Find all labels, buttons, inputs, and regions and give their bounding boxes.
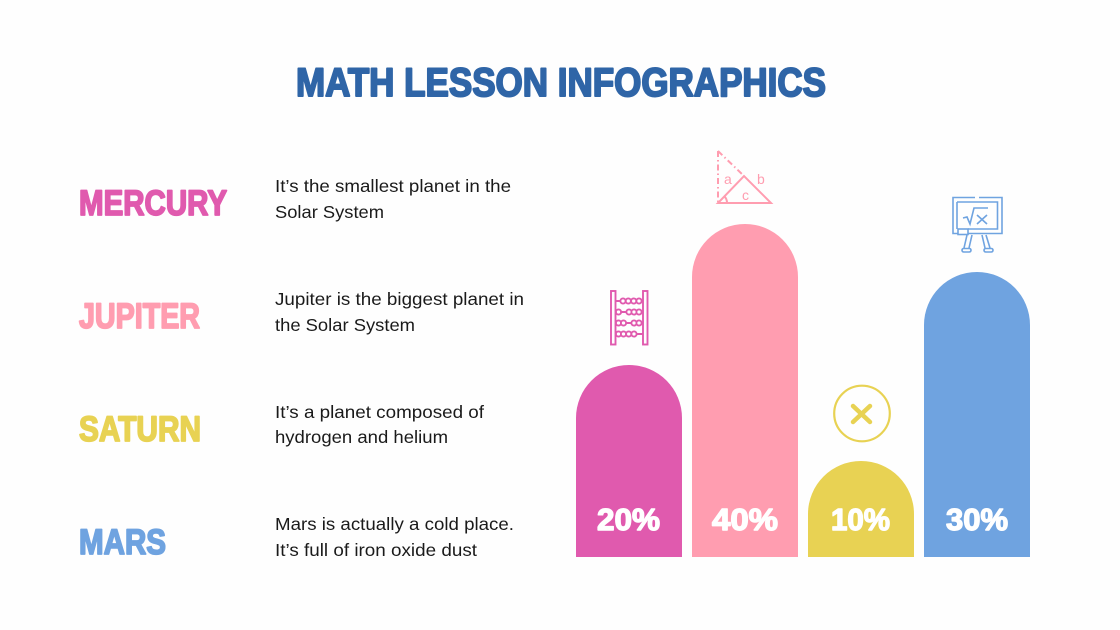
bar: 10%: 10% [831,502,890,537]
description: Saturn [275,402,484,447]
icon: multiply circle [834,386,890,441]
heading: Jupiter: JUPITER [79,297,200,336]
icon: whiteboard with square root [953,198,1002,252]
description: Jupiter [275,289,524,335]
bar chart [576,224,1030,557]
description: Mars [275,514,514,560]
bar: 40% [692,224,798,557]
description: Mars: It’s full of iron oxide dust [275,540,477,560]
row: Saturn [79,402,484,449]
description: Mars: Mars is actually a cold place. [275,514,514,534]
description: Mercury [275,176,511,222]
icon: triangle: b [757,171,765,187]
description: Jupiter: Jupiter is the biggest planet in [275,289,524,309]
icon: triangle: c [742,187,749,203]
row: Mars [79,514,514,562]
description: Mercury: Solar System [275,202,384,222]
heading: Mercury: MERCURY [79,184,227,223]
description: Saturn: It’s a planet composed of [275,402,484,422]
icon: triangle [718,151,771,203]
icon: abacus [611,291,648,344]
row: Jupiter [79,289,524,336]
bar: 20%: 20% [597,502,660,537]
description: Jupiter: the Solar System [275,315,415,335]
description: Saturn: hydrogen and helium [275,427,448,447]
bar: 30%: 30% [946,502,1008,537]
bar: 10% [808,461,914,557]
icon: triangle: a [724,171,732,187]
bar: 20% [576,365,682,557]
row: Mercury [79,176,511,223]
description: Mercury: It’s the smallest planet in the [275,176,511,196]
heading: Mars: MARS [79,523,166,562]
bar: 30% [924,272,1030,557]
heading: Saturn: SATURN [79,410,201,449]
title: MATH LESSON INFOGRAPHICS [296,61,826,105]
bar: 40%: 40% [712,502,778,537]
